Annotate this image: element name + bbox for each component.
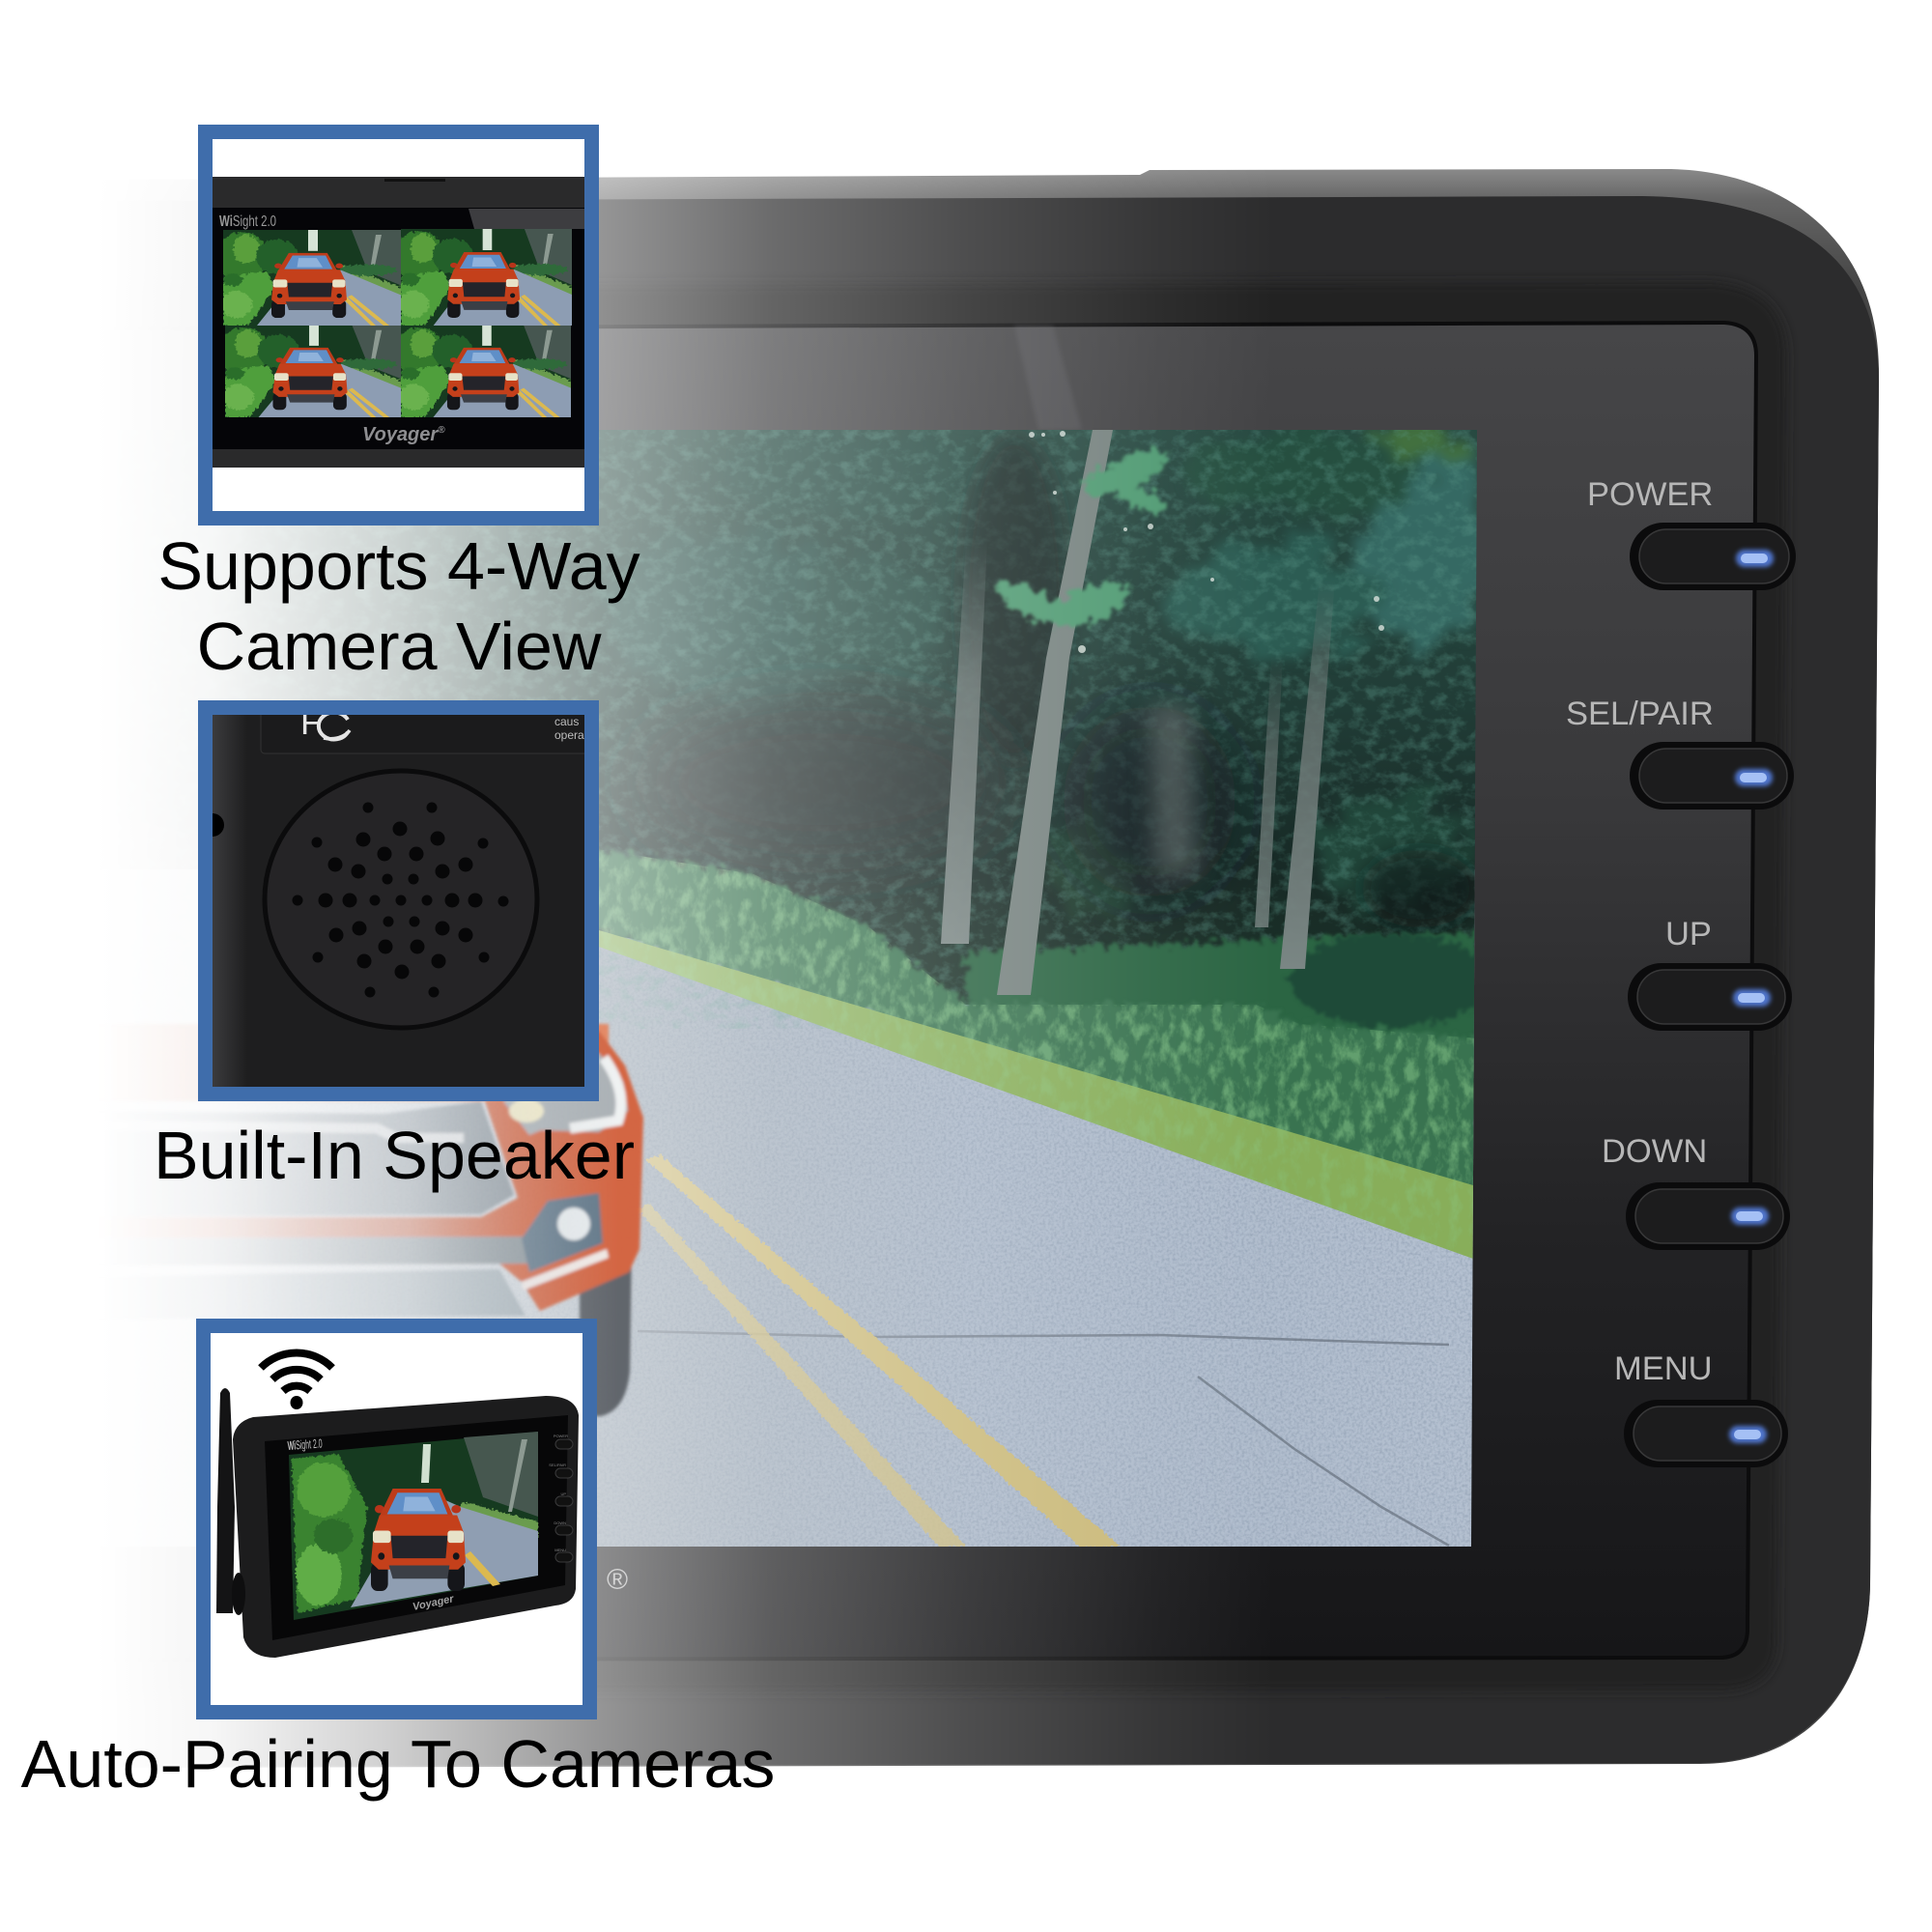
button POWER	[1630, 523, 1796, 590]
panel: 4-way camera view	[198, 125, 599, 526]
button MENU	[1624, 1400, 1788, 1467]
fog lamp	[557, 1208, 590, 1240]
fcc logo	[300, 702, 350, 742]
label UP: UP	[1665, 916, 1712, 952]
inner bezel shadow	[97, 282, 1787, 1692]
small monitor photo	[289, 1432, 538, 1620]
caption: supports 4-way camera view: Supports 4-Way	[157, 528, 640, 604]
label small text: caus	[554, 715, 579, 728]
road	[231, 869, 1475, 1547]
headlight	[503, 1053, 628, 1135]
antenna base	[232, 1573, 245, 1615]
tree crowns	[673, 430, 1477, 918]
side button labels: DOWN	[554, 1520, 566, 1525]
strip texture	[672, 952, 1473, 1258]
monitor top bevel	[97, 169, 1879, 1768]
trunk 1	[997, 430, 1113, 995]
white inner area	[211, 1333, 582, 1705]
truck hood	[97, 1024, 609, 1101]
grille highlight bar	[97, 1125, 464, 1138]
lower grille	[97, 1269, 526, 1320]
caption: supports 4-way camera view: Camera View	[197, 609, 602, 684]
caption: supports 4-way camera view	[157, 528, 640, 684]
foliage texture	[428, 430, 1477, 1029]
dark bushes	[1290, 934, 1492, 1027]
monitor bezel	[97, 196, 1879, 1766]
side button labels: SEL/PAIR	[549, 1463, 566, 1467]
voyager logo: Voyager	[412, 1593, 455, 1613]
panel: built-in speaker	[198, 696, 609, 1101]
monitor close-up	[213, 177, 584, 468]
icon: wifi	[261, 1353, 332, 1409]
side buttons	[555, 1439, 573, 1562]
tree trunks	[941, 430, 1335, 995]
glass screen panel	[97, 323, 1756, 1660]
small monitor	[233, 1396, 579, 1658]
panel: auto-pairing	[196, 1319, 597, 1719]
voyager logo: Voyager	[362, 424, 438, 445]
voyager logo: ®	[438, 425, 445, 436]
side button labels: POWER	[554, 1434, 568, 1438]
fender and bumper	[97, 1031, 643, 1311]
dark haze	[638, 700, 1005, 865]
button SEL/PAIR	[1630, 742, 1794, 810]
button UP	[1628, 963, 1792, 1031]
fcc logo: F	[300, 702, 322, 742]
trunk 4	[1255, 657, 1283, 927]
wisight logo: WiSight 2.0	[287, 1436, 323, 1453]
speaker grille	[265, 771, 537, 1028]
small truck	[371, 1489, 466, 1591]
label MENU: MENU	[1614, 1350, 1713, 1387]
lawn	[966, 932, 1478, 1183]
yellow road lines	[638, 1155, 1121, 1547]
caption: built-in speaker: Built-In Speaker	[154, 1118, 635, 1193]
button DOWN	[1626, 1182, 1790, 1250]
speaker close-up	[201, 696, 609, 1087]
control buttons	[1566, 476, 1796, 1467]
bright leaves on tree	[991, 441, 1174, 634]
camera photo on screen	[231, 430, 1477, 1547]
fog beam	[1150, 705, 1198, 874]
glass reflection wedge	[1014, 326, 1082, 430]
forest background	[444, 430, 1477, 1037]
trunk 2	[941, 541, 987, 944]
four camera tiles	[217, 229, 572, 417]
lower dark band	[97, 1236, 541, 1265]
side button labels: UP	[560, 1492, 566, 1496]
blue frame	[198, 125, 599, 526]
trunk 3	[1280, 580, 1335, 969]
headlight warm glow	[509, 1099, 544, 1122]
label POWER: POWER	[1587, 476, 1713, 513]
white inner area	[213, 139, 584, 511]
dark understory	[961, 435, 1478, 927]
label small text: opera	[554, 728, 584, 742]
tire	[580, 1241, 632, 1416]
registered mark: ®	[607, 1564, 628, 1596]
caption: auto-pairing to cameras: Auto-Pairing To Cameras	[21, 1726, 775, 1802]
fog lamp housing	[522, 1193, 603, 1272]
road cracks	[638, 1331, 1449, 1546]
grille	[97, 1101, 514, 1217]
grass texture	[599, 850, 1474, 1183]
sky specks	[1029, 431, 1384, 653]
blue frame	[198, 700, 599, 1101]
blue frame	[196, 1319, 597, 1719]
wisight logo: WiSight 2.0	[219, 213, 276, 230]
monitor body	[97, 169, 1879, 1768]
headlight chrome	[570, 1058, 621, 1128]
label DOWN: DOWN	[1602, 1133, 1707, 1170]
side button labels: MENU	[554, 1548, 566, 1552]
tall grass	[599, 846, 1474, 1190]
truck front	[97, 1024, 643, 1416]
side button labels	[549, 1434, 568, 1552]
yellow-green road strip	[599, 930, 1473, 1259]
label SEL/PAIR: SEL/PAIR	[1566, 696, 1714, 732]
lower trim highlight	[522, 1249, 609, 1291]
antenna	[216, 1388, 235, 1613]
